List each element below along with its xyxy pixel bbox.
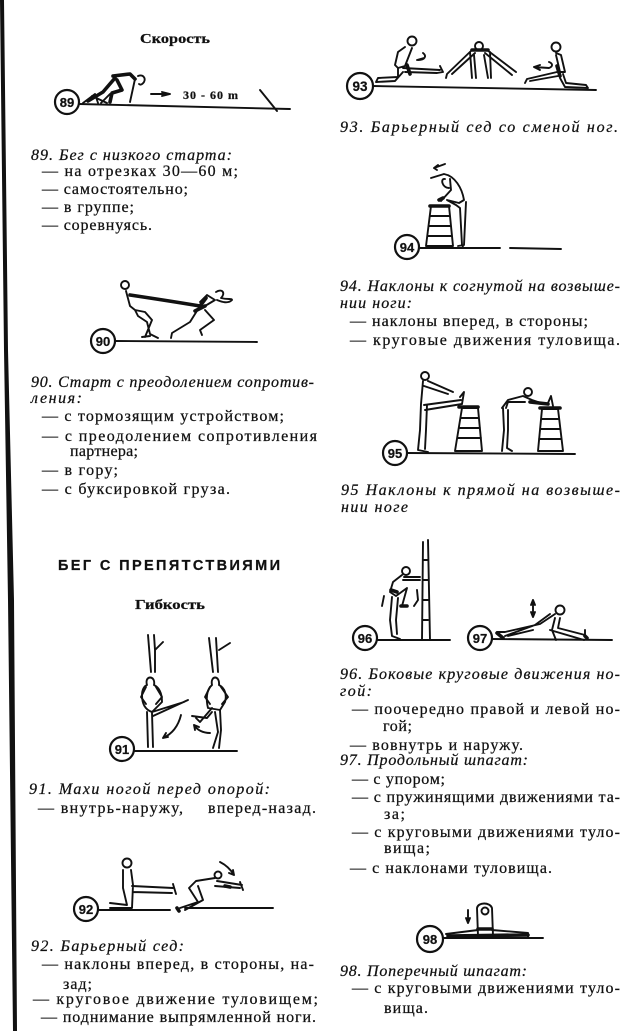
left page edge bar <box>0 0 17 1031</box>
text block 98 <box>340 963 620 1017</box>
figure 97: longitudinal split <box>468 600 612 650</box>
figure 96: side circular leg movements: 96 <box>358 631 372 646</box>
text block 90: ления: <box>30 390 82 407</box>
figure 95: bends to straight leg on a box <box>383 372 575 465</box>
heading: speed: Скорость <box>140 32 211 47</box>
figure 94: bends to bent leg on a box: 94 <box>400 240 415 255</box>
text block 96-97 <box>340 666 620 877</box>
figure 96: side circular leg movements <box>353 540 450 650</box>
text block 90: 90. Старт с преодолением сопротив- <box>31 374 314 391</box>
figure 89: low start runner: 30 - 60 m <box>183 88 238 102</box>
text block 89: 89. Бег с низкого старта: <box>31 147 232 164</box>
text block 89: — соревнуясь. <box>41 217 152 234</box>
figure 89: low start runner <box>55 74 290 114</box>
text block 96-97: 96. Боковые круговые движения но- <box>340 666 620 683</box>
figure 90: start against resistance <box>91 281 257 353</box>
text block 94: 94. Наклоны к согнутой на возвыше- <box>340 278 620 295</box>
text block 92: — круговое движение туловищем; <box>32 991 318 1008</box>
text block 98: 98. Поперечный шпагат: <box>340 963 527 980</box>
figure 89: low start runner: 89 <box>60 95 74 110</box>
text block 89 <box>31 147 238 234</box>
text block 98: — с круговыми движениями туло- <box>351 980 620 997</box>
text block 90 <box>30 374 318 498</box>
text block 92: — поднимание выпрямленной ноги. <box>40 1009 316 1026</box>
text block 95 <box>341 482 620 516</box>
text block 89: — самостоятельно; <box>41 181 188 198</box>
panel: flexibility section <box>29 598 318 1026</box>
text block 93: 93. Барьерный сед со сменой ног. <box>340 119 618 136</box>
text block 96-97: — с наклонами туловища. <box>349 860 552 877</box>
figure 90: start against resistance: 90 <box>96 334 110 349</box>
figure 93: hurdle sit with leg change <box>347 36 596 99</box>
text block 92: зад; <box>63 976 92 993</box>
figure 93: hurdle sit with leg change: 93 <box>352 79 368 94</box>
figure 92: hurdle sit: 92 <box>79 902 93 917</box>
text block 90: — в гору; <box>41 462 118 479</box>
text block 94: нии ноги: <box>340 295 412 312</box>
figure 91: leg swings in front of support: 91 <box>115 742 129 757</box>
figure 95: bends to straight leg on a box: 95 <box>388 446 402 461</box>
text block 96-97: 97. Продольный шпагат: <box>340 752 528 769</box>
text block 89: — в группе; <box>41 199 134 216</box>
panel: right column exercises <box>340 36 620 1017</box>
text block 90: партнера; <box>70 443 138 460</box>
text block 94: — круговые движения туловища. <box>349 332 620 349</box>
heading: flexibility: Гибкость <box>135 598 206 613</box>
text block 91: вперед-назад. <box>208 800 316 817</box>
text block 90: — с преодолением сопротивления <box>41 428 318 445</box>
text block 96-97: за; <box>384 806 405 823</box>
figure 92: hurdle sit <box>74 858 273 921</box>
text block 96-97: — вовнутрь и наружу. <box>349 737 523 754</box>
text block 91: 91. Махи ногой перед опорой: <box>29 781 270 798</box>
text block 95: нии ноге <box>341 499 408 516</box>
text block 98: вища. <box>384 1000 428 1017</box>
text block 96-97: гой: <box>340 683 372 700</box>
figure 94: bends to bent leg on a box <box>395 164 561 259</box>
text block 95: 95 Наклоны к прямой на возвыше- <box>341 482 620 499</box>
figure 98: transverse split: 98 <box>423 932 437 947</box>
text block 89: — на отрезках 30—60 м; <box>41 163 238 180</box>
main heading: running with obstacles: БЕГ С ПРЕПЯТСТВИЯМИ <box>58 558 280 574</box>
text block 96-97: — с круговыми движениями туло- <box>351 824 620 841</box>
text block 96-97: — с пружинящими движениями та- <box>351 789 620 806</box>
figure 91: leg swings in front of support <box>110 635 237 761</box>
text block 90: — с тормозящим устройством; <box>41 408 284 425</box>
figure 98: transverse split <box>417 904 543 952</box>
text block 90: — с буксировкой груза. <box>41 481 230 498</box>
text block 92 <box>31 938 318 1026</box>
text block 96-97: — поочередно правой и левой но- <box>351 701 620 718</box>
text block 91 <box>29 781 316 817</box>
panel: speed section <box>30 32 318 498</box>
text block 96-97: — с упором; <box>351 771 445 788</box>
figure 97: longitudinal split: 97 <box>473 631 487 646</box>
text block 96-97: вища; <box>384 840 430 857</box>
text block 91: — внутрь-наружу, <box>37 800 183 817</box>
text block 96-97: гой; <box>383 718 412 735</box>
text block 94: — наклоны вперед, в стороны; <box>349 313 588 330</box>
text block 92: — наклоны вперед, в стороны, на- <box>41 956 314 973</box>
text block 92: 92. Барьерный сед: <box>31 938 184 955</box>
text block 94 <box>340 278 620 349</box>
